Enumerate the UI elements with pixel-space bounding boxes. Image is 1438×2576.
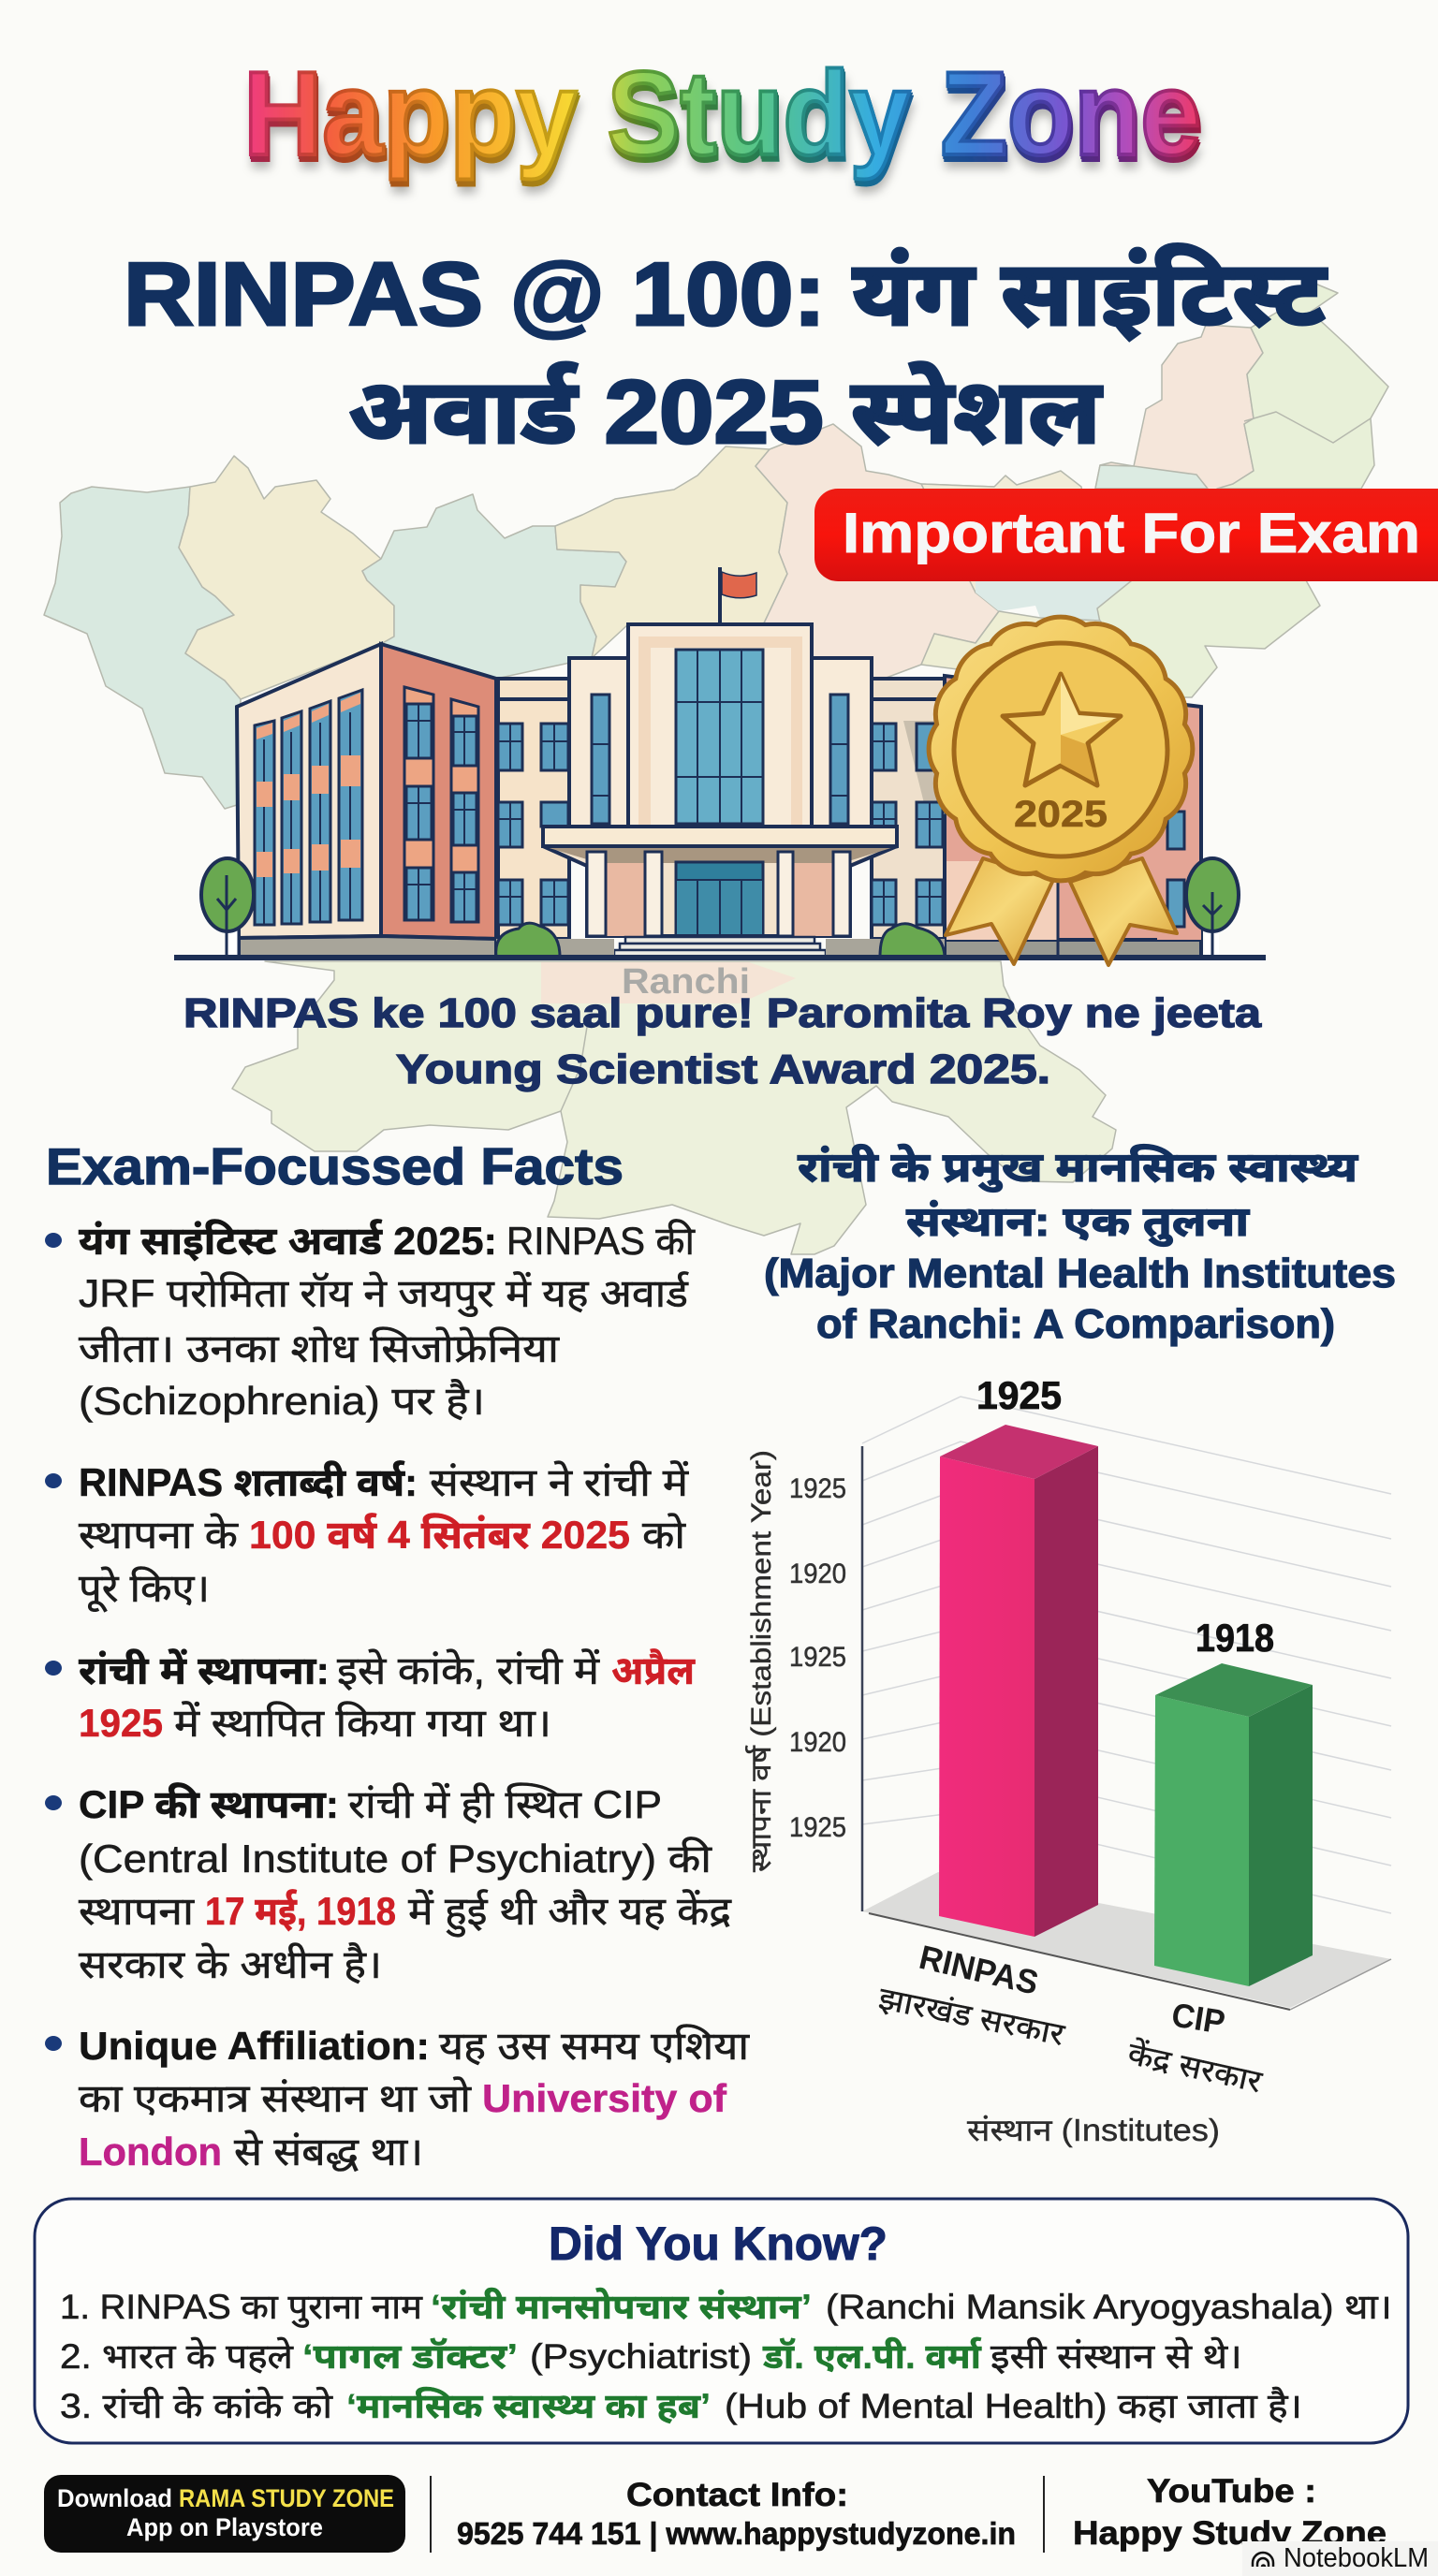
fact 2: RINPAS centenary: 100 वर्ष 4 सितंबर 2025 [249,1513,630,1557]
y axis tick labels: 1920 [789,1727,846,1758]
footer: YouTube: Happy Study Zone [1073,2515,1387,2552]
fact 2: RINPAS centenary: को [642,1513,686,1557]
trees [201,858,1239,957]
y axis title: स्थापना वर्ष (Establishment Year) [745,1450,777,1872]
x label: CIP: केंद्र सरकार [1124,2036,1266,2099]
did you know line 2 [60,2336,1242,2376]
fact 2: RINPAS centenary: स्थापना के [79,1513,239,1557]
chart heading: रांची के प्रमुख मानसिक स्वास्थ्य [798,1143,1358,1193]
bar: CIP 1918 [1154,1616,1313,1986]
central tower [569,658,872,831]
plinth centre [496,939,614,957]
fact 1: young scientist award: जीता। उनका शोध सिजोफ्रेनिया [79,1326,560,1370]
did you know line 2: डॉ. एल.पी. वर्मा [762,2336,982,2376]
3D chart floor [862,1872,1391,2008]
fact 5: unique affiliation: Unique Affiliation: [79,2024,430,2068]
main heading: RINPAS @ 100: यंग साइंटिस्ट [124,244,1327,344]
fact 3: establishment in Ranchi: 1925 [79,1701,163,1745]
middle block left windows [498,724,568,925]
star [1003,674,1121,785]
fact 5: unique affiliation: से संबद्ध था। [234,2130,423,2174]
middle block right [872,679,945,939]
y axis tick labels: 1925 [789,1812,846,1843]
ground line [174,955,1266,960]
did you know heading: Did You Know? [549,2217,888,2270]
y axis tick labels: 1925 [789,1473,846,1504]
shadow cast by medal [903,721,945,814]
chart heading: of Ranchi: A Comparison) [816,1301,1335,1347]
fact 5: unique affiliation: University of [482,2076,727,2120]
fact 4: CIP establishment: 17 मई, 1918 [205,1889,396,1933]
subtitle [183,990,1262,1092]
panel: exam-focussed facts [45,1137,750,2174]
subtitle: RINPAS ke 100 saal pure! Paromita Roy ne jeeta [183,990,1262,1036]
fact 1: young scientist award: RINPAS की [506,1219,696,1263]
footer: contact info: Contact Info: [626,2477,848,2513]
main heading: अवार्ड 2025 स्पेशल [348,361,1103,462]
illustration: hospital building [174,567,1266,960]
y axis tick labels: 1925 [789,1642,846,1673]
fact 4: CIP establishment: सरकार के अधीन है। [79,1942,382,1986]
left wing plinth [239,936,496,957]
subtitle: Young Scientist Award 2025. [396,1046,1050,1092]
gold medal 2025 [929,617,1193,965]
footer: app download pill: Download [57,2484,172,2512]
fact 1: young scientist award: यंग साइंटिस्ट अवार्ड 2025: [79,1219,497,1263]
bar: RINPAS 1925: 1925 [976,1373,1062,1417]
fact 2: RINPAS centenary: RINPAS शताब्दी वर्ष: [79,1460,418,1504]
chart axes [862,1446,1391,2010]
NotebookLM watermark [1242,2541,1438,2576]
did you know line 3: (Hub of Mental Health) कहा जाता है। [725,2387,1302,2425]
right wing [945,676,1201,940]
main heading [124,244,1327,462]
x label: CIP: CIP [1169,1995,1227,2042]
did you know line 1: (Ranchi Mansik Aryogyashala) था। [826,2288,1392,2326]
bar: RINPAS 1925 [939,1373,1098,1937]
heading: exam-focussed facts: Exam-Focussed Facts [46,1137,624,1195]
did you know line 3: ‘मानसिक स्वास्थ्य का हब’ [346,2387,711,2425]
footer: contact info: 9525 744 151 | www.happystudyzone.in [457,2516,1016,2551]
fact 3: establishment in Ranchi: अप्रैल [611,1648,696,1692]
chart heading: संस्थान: एक तुलना [906,1199,1250,1247]
fact 4: CIP establishment [45,1782,732,1986]
footer: app download pill: App on Playstore [126,2513,323,2541]
did you know line 3 [60,2387,1302,2425]
panel: institute comparison chart [745,1143,1396,2147]
brand title: Happy Study Zone: Happy Study Zone [243,47,1201,180]
cream face windows [255,690,362,925]
fact 3: establishment in Ranchi: रांची में स्थापना: [79,1648,330,1692]
fact 5: unique affiliation: का एकमात्र संस्थान था जो [79,2076,472,2120]
flag [720,567,756,624]
fact 3: establishment in Ranchi [45,1648,696,1745]
fact 2: RINPAS centenary: पूरे किए। [79,1566,210,1612]
salmon face windows [404,687,478,922]
fact 4: CIP establishment: (Central Institute of Psychiatry) की [79,1837,712,1881]
footer: app download pill [44,2475,405,2553]
x label: RINPAS: RINPAS [916,1938,1042,2002]
badge: Important For Exam: Important For Exam [843,502,1420,564]
fact 5: unique affiliation [45,2024,750,2174]
fact 4: CIP establishment: स्थापना [79,1889,195,1933]
middle block right windows [872,724,943,925]
steps [614,937,826,957]
fact 4: CIP establishment: CIP की स्थापना: [79,1782,339,1826]
y axis tick labels: 1920 [789,1559,846,1589]
left wing cream face [237,644,381,938]
did you know line 3: 3. रांची के कांके को [60,2387,334,2425]
did you know line 1 [60,2288,1392,2328]
left wing salmon face [381,644,496,939]
fact 2: RINPAS centenary [45,1460,689,1612]
NotebookLM watermark: NotebookLM [1284,2543,1429,2573]
entrance [543,827,897,936]
x label: RINPAS [876,1938,1067,2052]
bar: CIP 1918: 1918 [1196,1616,1274,1660]
fact 5: unique affiliation: London [79,2130,222,2174]
fact 4: CIP establishment: रांची में ही स्थित CIP [348,1782,662,1826]
right wing lower detail [945,812,1201,957]
chart heading: (Major Mental Health Institutes [764,1251,1396,1296]
map label: Ranchi: Ranchi [622,962,750,1002]
fact 1: young scientist award: (Schizophrenia) पर है। [79,1379,485,1423]
footer: app download pill: RAMA STUDY ZONE [179,2484,394,2512]
tower glass [592,650,848,824]
y axis tick labels [789,1473,846,1843]
middle block left [498,679,569,939]
fact 2: RINPAS centenary: संस्थान ने रांची में [430,1460,689,1504]
did you know line 2: इसी संस्थान से थे। [990,2337,1242,2376]
x label: RINPAS: झारखंड सरकार [876,1981,1067,2052]
chart heading [764,1143,1396,1347]
badge: Important For Exam [814,489,1438,581]
x label: CIP [1124,1995,1266,2099]
did you know line 2: 2. भारत के पहले [60,2337,294,2376]
bushes [496,923,945,957]
ribbons [946,858,1177,965]
did you know line 1: 1. RINPAS का पुराना नाम [60,2288,423,2328]
fact 1: young scientist award [45,1219,696,1423]
did you know line 2: ‘पागल डॉक्टर’ [302,2337,518,2376]
footer: YouTube [1073,2473,1387,2552]
x axis title: संस्थान (Institutes) [967,2113,1220,2147]
fact 4: CIP establishment: में हुई थी और यह केंद्र [408,1889,732,1938]
did you know line 1: ‘रांची मानसोपचार संस्थान’ [431,2288,812,2326]
panel: did you know [35,2199,1408,2443]
fact 5: unique affiliation: यह उस समय एशिया [439,2024,750,2068]
chart grid [862,1397,1391,1913]
background map of Jharkhand districts [44,284,1388,1254]
fact 3: establishment in Ranchi: में स्थापित किया गया था। [174,1701,551,1745]
did you know line 2: (Psychiatrist) [530,2337,752,2376]
fact 1: young scientist award: JRF परोमिता रॉय ने जयपुर में यह अवार्ड [79,1271,689,1317]
fact 3: establishment in Ranchi: इसे कांके, रांची में [337,1648,600,1692]
footer: contact info [457,2477,1016,2551]
gold medal 2025: 2025 [1014,794,1108,835]
footer: YouTube: YouTube : [1147,2473,1316,2510]
